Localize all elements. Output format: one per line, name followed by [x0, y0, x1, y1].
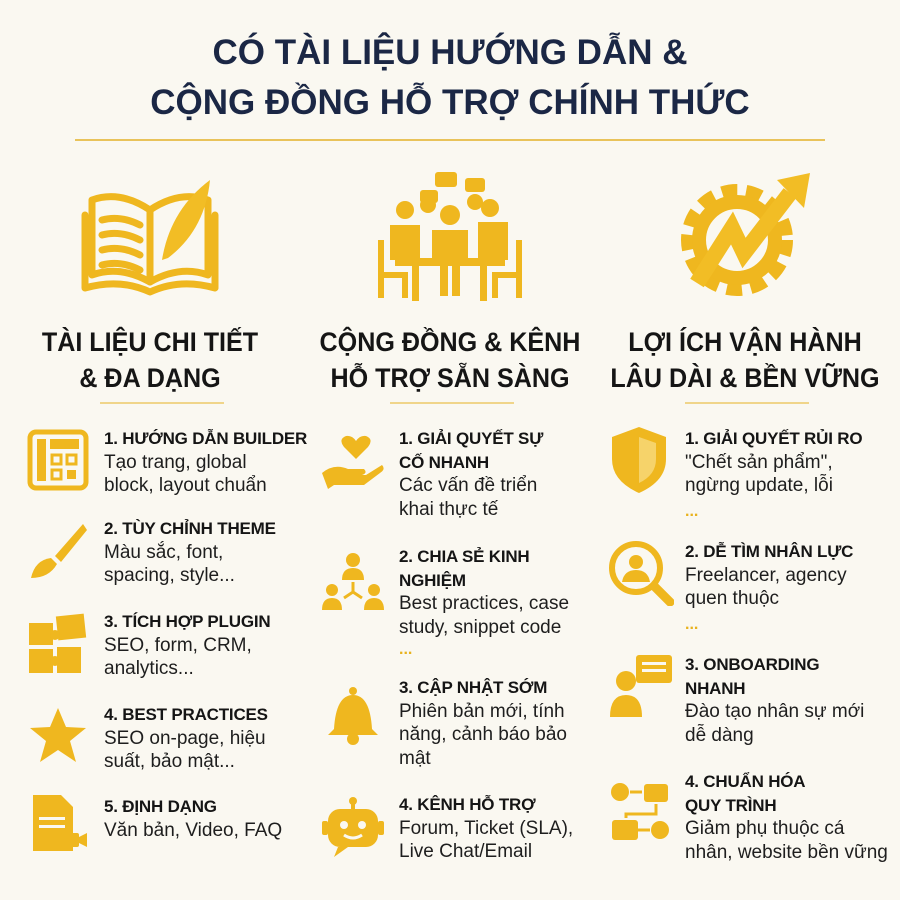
item 3: NHANH — [685, 678, 745, 698]
item 2 — [104, 519, 276, 586]
item 4 — [104, 705, 268, 772]
item 2: 2. TÙY CHỈNH THEME — [104, 519, 276, 538]
item 1: 1. GIẢI QUYẾT RỦI RO — [685, 429, 862, 448]
item 4: Forum, Ticket (SLA), — [399, 818, 573, 838]
panel: column 2 items: ... — [399, 641, 412, 658]
item 4: nhân, website bền vững — [685, 842, 888, 862]
icon: person search — [609, 541, 674, 606]
icon: onboarding person with board — [610, 655, 672, 717]
item 3 — [104, 612, 270, 679]
item 1: Các vấn đề triển — [399, 475, 537, 496]
heading: column 1: TÀI LIỆU CHI TIẾT — [42, 327, 258, 357]
item 1: 1. GIẢI QUYẾT SỰ — [399, 429, 543, 448]
heading: column 2: HỖ TRỢ SẴN SÀNG — [330, 363, 570, 393]
icon: shield — [612, 427, 666, 493]
icon: document with video — [33, 795, 87, 851]
item 4: Giảm phụ thuộc cá — [685, 818, 844, 839]
icon: team meeting — [378, 172, 522, 301]
item 1 — [685, 429, 862, 496]
item 1: ngừng update, lỗi — [685, 475, 833, 496]
item 2 — [685, 542, 853, 609]
item 2: 2. DỄ TÌM NHÂN LỰC — [685, 542, 853, 561]
item 2: Freelancer, agency — [685, 564, 847, 586]
item 2: 2. CHIA SẺ KINH — [399, 547, 530, 566]
item 3: 3. TÍCH HỢP PLUGIN — [104, 612, 270, 631]
title — [150, 32, 750, 122]
item 3: năng, cảnh báo bảo — [399, 724, 567, 745]
heading: column 1: & ĐA DẠNG — [79, 363, 221, 393]
item 3: SEO, form, CRM, — [104, 634, 252, 656]
item 4: 4. BEST PRACTICES — [104, 705, 268, 724]
item 3: Phiên bản mới, tính — [399, 700, 565, 722]
icon: process flow — [611, 783, 669, 840]
icon: gear with arrow — [681, 173, 810, 296]
icon: puzzle — [29, 614, 86, 673]
item 5: 5. ĐỊNH DẠNG — [104, 797, 217, 816]
title: CỘNG ĐỒNG HỖ TRỢ CHÍNH THỨC — [150, 83, 750, 122]
icon: star — [30, 708, 86, 762]
item 5 — [104, 797, 282, 840]
item 3: dễ dàng — [685, 724, 754, 746]
icon: heart in hand — [322, 436, 384, 489]
panel: column 3 items: ... — [685, 616, 698, 633]
item 3 — [399, 678, 567, 768]
item 1 — [399, 429, 544, 520]
item 4: Live Chat/Email — [399, 841, 532, 862]
item 2: Màu sắc, font, — [104, 542, 223, 562]
heading: column 3 — [610, 326, 880, 393]
title: CÓ TÀI LIỆU HƯỚNG DẪN & — [212, 33, 688, 72]
heading: column 2: CỘNG ĐỒNG & KÊNH — [320, 327, 580, 357]
item 1: Tạo trang, global — [104, 452, 247, 472]
item 4 — [685, 772, 888, 862]
panel: column 2 items — [322, 429, 573, 862]
panel: column 3 items: ... — [685, 503, 698, 520]
icon: bell — [328, 687, 378, 745]
icon: builder layout — [28, 430, 88, 490]
item 2: spacing, style... — [104, 565, 235, 586]
item 1: 1. HƯỚNG DẪN BUILDER — [104, 429, 307, 448]
item 1 — [104, 429, 307, 496]
icon: chatbot — [322, 797, 384, 857]
heading: column 3: LỢI ÍCH VẬN HÀNH — [628, 327, 862, 357]
heading: column 1 — [42, 326, 258, 393]
panel: column 3 items — [609, 427, 888, 862]
panel: column 1 items — [28, 429, 307, 851]
item 5: Văn bản, Video, FAQ — [104, 820, 282, 840]
item 4: suất, bảo mật... — [104, 751, 235, 772]
item 4: SEO on-page, hiệu — [104, 728, 266, 748]
item 4: 4. KÊNH HỖ TRỢ — [399, 795, 535, 814]
item 3: Đào tạo nhân sự mới — [685, 701, 864, 722]
item 2: Best practices, case — [399, 593, 569, 614]
heading: column 3: LÂU DÀI & BỀN VỮNG — [610, 363, 880, 393]
item 3: 3. ONBOARDING — [685, 655, 819, 674]
item 1: "Chết sản phẩm", — [685, 452, 833, 472]
icon: people network — [322, 553, 384, 610]
item 2: study, snippet code — [399, 616, 561, 638]
item 1: block, layout chuẩn — [104, 475, 267, 496]
icon: brush — [31, 524, 87, 578]
item 2: quen thuộc — [685, 588, 779, 609]
item 2: NGHIỆM — [399, 570, 466, 590]
item 2 — [399, 547, 569, 638]
item 3 — [685, 655, 864, 746]
item 3: mật — [399, 748, 431, 768]
item 1: CỐ NHANH — [399, 452, 489, 472]
item 3: analytics... — [104, 658, 194, 679]
item 4: 4. CHUẨN HÓA — [685, 772, 805, 791]
icon: open book with quill — [82, 180, 218, 296]
heading: column 2 — [320, 326, 580, 393]
item 4 — [399, 795, 573, 862]
item 3: 3. CẬP NHẬT SỚM — [399, 678, 547, 697]
item 1: khai thực tế — [399, 498, 498, 520]
item 4: QUY TRÌNH — [685, 796, 776, 814]
